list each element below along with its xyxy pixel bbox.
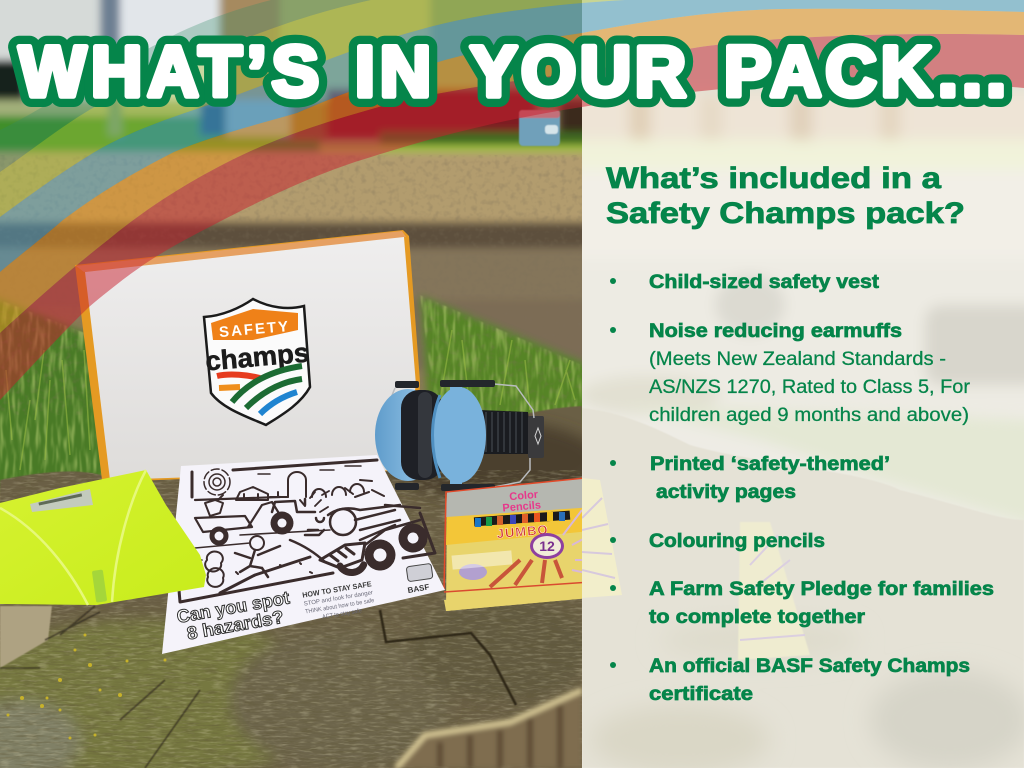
panel heading: What’s included in a (606, 162, 941, 195)
red arc (0, 34, 1024, 400)
lime arc (0, 0, 625, 217)
pencils row (474, 511, 570, 527)
sheet instructions: THINK about how to be safe (305, 598, 375, 616)
item: activity pages: activity pages (656, 482, 796, 503)
sheet illustration (179, 460, 435, 602)
right panel: faded photo background (570, 0, 1024, 768)
activity sheet (162, 455, 445, 654)
rainbow arcs (0, 0, 1024, 400)
title: ... (938, 33, 1006, 112)
panel heading (606, 162, 965, 230)
item: vest: Child-sized safety vest (649, 272, 880, 293)
grass blades (6, 330, 575, 470)
colouring pencils box: Pencils (502, 499, 541, 515)
sheet BASF mark (406, 563, 433, 595)
title: IN (355, 33, 431, 112)
yellow lichen flecks (6, 634, 166, 740)
title: ... (938, 33, 1006, 112)
sheet instructions: ACT to stay safe (322, 608, 363, 621)
bullet list markers (610, 278, 616, 668)
stump top edge (0, 406, 582, 768)
colouring pencils box: JUMBO (496, 522, 549, 541)
earmuffs (375, 380, 544, 491)
pack box with Safety Champs logo (75, 230, 420, 482)
teal-green arc (0, 0, 371, 172)
sheet heading: spot the hazards (175, 588, 294, 645)
blue arc (0, 0, 1024, 272)
title (19, 33, 1006, 112)
item: pencils: Colouring pencils (649, 531, 825, 552)
item: earmuffs: Noise reducing earmuffs (649, 321, 902, 342)
logo: shield (204, 299, 310, 425)
faded pencil box on panel (582, 478, 622, 598)
cracks (0, 606, 516, 768)
item: certificate: An official BASF Safety Champs (649, 656, 970, 677)
sheet heading: spot the hazards: Can you spot (175, 588, 291, 627)
orange arc (0, 9, 1024, 333)
title: IN (355, 33, 431, 112)
item: certificate (649, 656, 970, 705)
sheet instructions: HOW TO STAY SAFE (302, 579, 372, 600)
item: certificate: certificate (649, 684, 753, 705)
ghost pencil box (738, 522, 810, 660)
photo background: farm yard and tree stump (0, 0, 600, 768)
title: WHAT’S (19, 33, 319, 112)
item: earmuffs (649, 321, 971, 426)
logo: shield: SAFETY (218, 318, 291, 341)
colouring pencils box (444, 478, 622, 611)
safety vest (0, 470, 206, 605)
sheet instructions: STOP and look for danger (303, 590, 374, 608)
light sapwood (0, 606, 52, 668)
pack contents list (610, 272, 994, 705)
panel heading: Safety Champs pack? (606, 197, 965, 230)
logo: shield: champs (204, 338, 310, 377)
item: pledge: to complete together (649, 607, 866, 628)
title: WHAT’S (19, 33, 319, 112)
item: activity pages (650, 454, 890, 503)
colouring pencils box: Color (509, 489, 539, 503)
title: YOUR (470, 33, 686, 112)
barrel (519, 110, 560, 146)
item: pledge (649, 579, 994, 628)
item: earmuffs: children aged 9 months and above) (649, 405, 969, 426)
title: PACK (724, 33, 932, 112)
colouring pencils box: 12 (539, 538, 555, 554)
sheet heading: spot the hazards: 8 hazards? (185, 607, 285, 644)
item: earmuffs: AS/NZS 1270, Rated to Class 5, For (649, 377, 971, 398)
sheet BASF mark: BASF (407, 582, 430, 595)
title: YOUR (470, 33, 686, 112)
item: pledge: A Farm Safety Pledge for families (649, 579, 994, 600)
title: PACK (724, 33, 932, 112)
sheet instructions (302, 579, 377, 623)
item: earmuffs: (Meets New Zealand Standards - (649, 349, 946, 370)
item: activity pages: Printed ‘safety-themed’ (650, 454, 890, 475)
